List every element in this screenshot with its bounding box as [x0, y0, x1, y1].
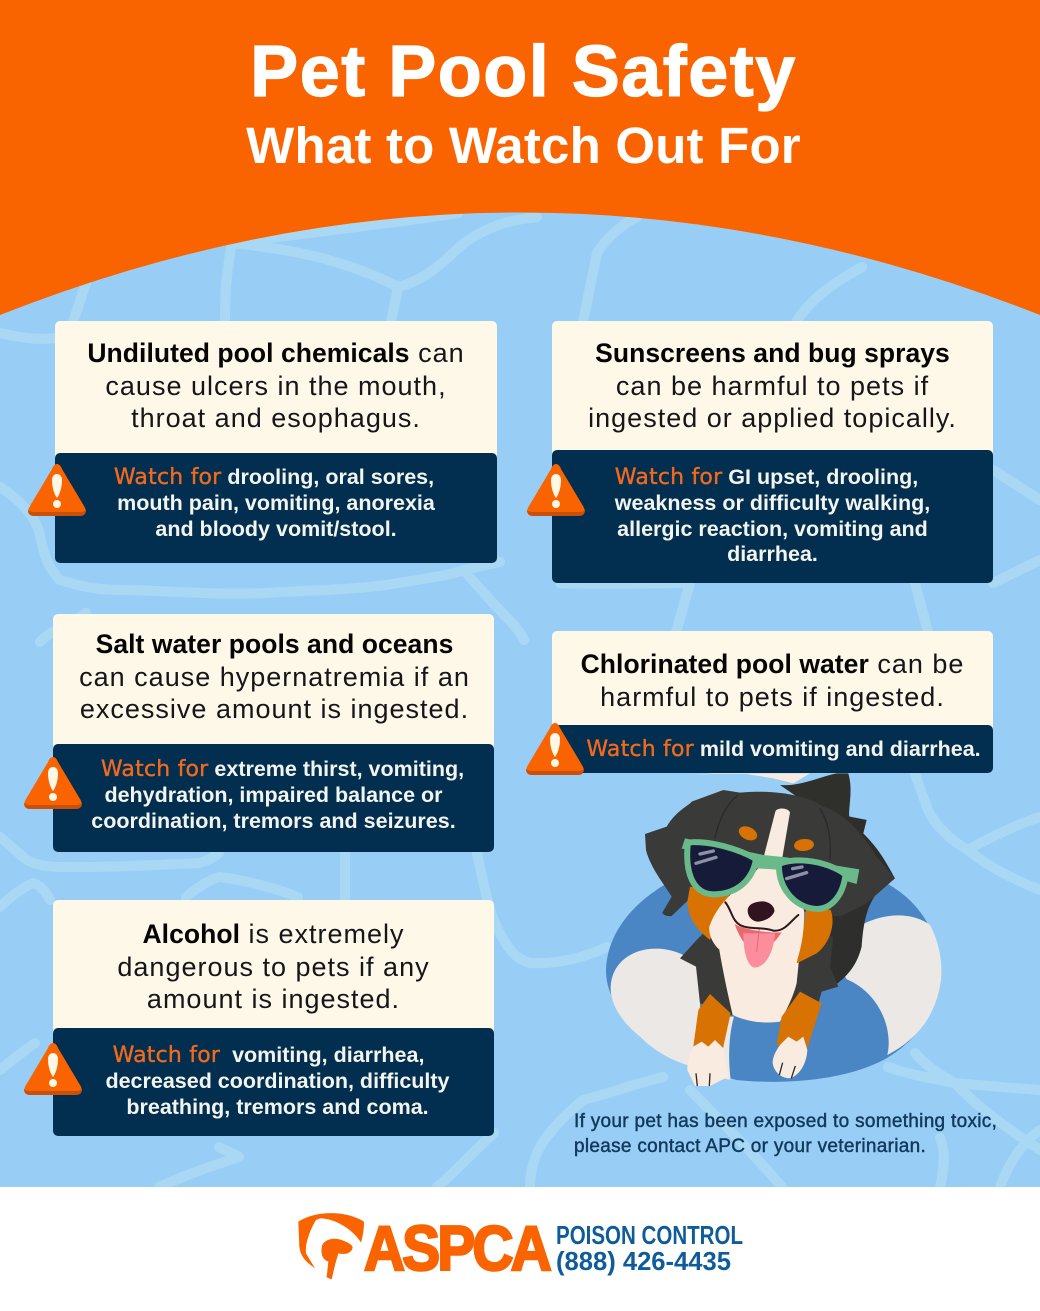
watch-for box: salt water: Watch for extreme thirst, vomiting, [101, 757, 464, 782]
head lines [715, 795, 830, 860]
text: chlorine risk: harmful to pets if ingested. [600, 682, 945, 712]
watch-for box: sunscreen: Watch for GI upset, drooling, [615, 465, 918, 490]
text: alcohol risk: dangerous to pets if any [117, 952, 430, 982]
icon: ASPCA shield [298, 1213, 364, 1279]
logo wordmark: ASPCA [364, 1213, 550, 1284]
head fur [645, 790, 895, 917]
muzzle [709, 867, 804, 966]
blaze [763, 809, 790, 862]
cheeks orange [687, 887, 730, 940]
text: sunscreen risk: can be harmful to pets if [616, 371, 929, 401]
panel: chlorinated water [552, 631, 993, 773]
panel: sunscreens and bug sprays [552, 321, 993, 583]
footer note: please contact APC or your veterinarian. [574, 1136, 926, 1156]
text: chemicals risk: Undiluted pool chemicals can [87, 338, 465, 368]
glasses [682, 838, 859, 884]
watch-for box: sunscreen: diarrhea. [727, 542, 818, 566]
text: salt water risk: excessive amount is ingested. [80, 694, 469, 724]
fur back [813, 813, 895, 987]
float ring [606, 882, 942, 1082]
watch-for box: salt water: coordination, tremors and seizures. [91, 809, 456, 833]
text: salt water risk: can cause hypernatremia if an [79, 662, 470, 692]
watch-for box: chlorine: Watch for mild vomiting and diarrhea. [586, 737, 981, 762]
watch-for box: chemicals: Watch for drooling, oral sores, [114, 465, 434, 490]
footer band [0, 1187, 1040, 1311]
watch-for box: alcohol: decreased coordination, difficulty [105, 1069, 450, 1093]
text: salt water risk: Salt water pools and oceans [96, 629, 453, 659]
hand and tail [693, 773, 810, 783]
watch-for box: sunscreen [552, 450, 993, 583]
text: alcohol risk: Alcohol is extremely [142, 919, 405, 949]
chest [719, 950, 800, 1023]
header banner [0, 0, 1040, 315]
footer note [574, 1111, 997, 1156]
watch-for box: alcohol: breathing, tremors and coma. [126, 1095, 429, 1119]
watch-for box: alcohol [53, 1028, 494, 1136]
text: alcohol risk: amount is ingested. [147, 984, 400, 1014]
text: chlorine risk [581, 649, 964, 712]
watch-for box: chemicals: and bloody vomit/stool. [155, 517, 397, 541]
nose [748, 901, 774, 922]
phone number: (888) 426-4435 [556, 1246, 731, 1276]
text: sunscreen risk [588, 338, 957, 433]
poison control label: POISON CONTROL [556, 1220, 743, 1250]
watch-for box: chlorine [552, 725, 993, 773]
watch-for box: chemicals: mouth pain, vomiting, anorexia [117, 491, 435, 515]
text: chemicals risk [87, 338, 465, 433]
text: chemicals risk: cause ulcers in the mouth, [105, 371, 447, 401]
text: chemicals risk: throat and esophagus. [131, 403, 421, 433]
eyebrows [737, 824, 759, 843]
icon: warning triangle 1 [28, 464, 86, 516]
watch-for box: salt water [53, 744, 494, 852]
icon: warning triangle 4 [526, 723, 584, 775]
watch-for box: chemicals [55, 453, 497, 563]
text: alcohol risk [117, 919, 430, 1014]
mouth and tongue [735, 924, 782, 943]
watch-for box: sunscreen: weakness or difficulty walking, [615, 491, 930, 515]
subtitle: What to Watch Out For [246, 117, 801, 174]
title: Pet Pool Safety [250, 32, 797, 112]
footer note: If your pet has been exposed to something toxic, [574, 1111, 997, 1132]
icon: warning triangle 3 [24, 757, 82, 809]
front legs [693, 994, 731, 1047]
text: chlorine risk: Chlorinated pool water can be [581, 649, 964, 679]
panel: undiluted pool chemicals [55, 321, 497, 563]
icon: warning triangle 2 [527, 464, 585, 516]
watch-for box: salt water: dehydration, impaired balance or [104, 783, 443, 807]
watch-for box: alcohol: Watch for vomiting, diarrhea, [113, 1043, 424, 1068]
text: sunscreen risk: ingested or applied topically. [588, 403, 957, 433]
panel: alcohol [53, 900, 494, 1136]
watch-for box: sunscreen: allergic reaction, vomiting and [617, 517, 928, 541]
panel: salt water [53, 614, 494, 852]
icon: warning triangle 5 [24, 1043, 82, 1095]
body [680, 927, 838, 1022]
text: salt water risk [79, 629, 470, 724]
text: sunscreen risk: Sunscreens and bug sprays [595, 338, 950, 368]
